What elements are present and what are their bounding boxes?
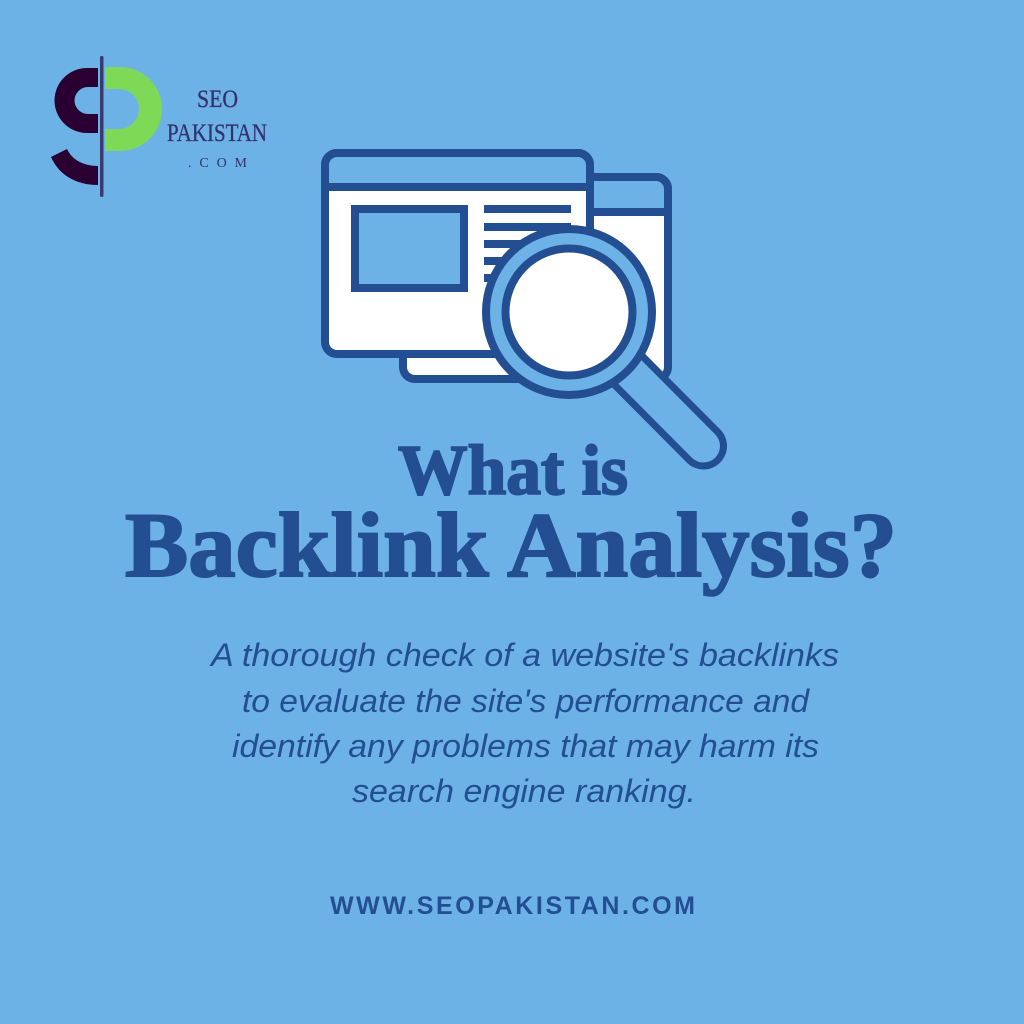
- text lines: [484, 205, 571, 282]
- logo divider: [100, 56, 104, 197]
- image placeholder: [355, 209, 464, 288]
- magnifier handle: [612, 354, 704, 446]
- description paragraph: to evaluate the site's performance and: [242, 683, 810, 719]
- back browser window: [403, 177, 668, 379]
- logo wordmark: SEO: [197, 86, 238, 113]
- magnifier outer ring: [486, 229, 652, 395]
- title line 1: What is: [398, 432, 628, 510]
- description paragraph: identify any problems that may harm its: [232, 728, 819, 764]
- illustration: browser windows and magnifying glass: [325, 153, 704, 446]
- description paragraph: search engine ranking.: [352, 773, 696, 809]
- website URL: WWW.SEOPAKISTAN.COM: [330, 892, 695, 920]
- logo wordmark: [167, 86, 267, 171]
- front browser window: [325, 153, 590, 354]
- magnifier lens: [506, 248, 632, 376]
- logo wordmark: .COM: [188, 156, 248, 171]
- description paragraph: A thorough check of a website's backlinks: [209, 637, 839, 673]
- description paragraph: [209, 637, 839, 809]
- icon: logo S lettermark: [51, 68, 98, 185]
- logo wordmark: PAKISTAN: [167, 120, 267, 147]
- icon: logo P lettermark: [105, 67, 162, 151]
- logo: SEO Pakistan: [51, 56, 267, 197]
- title: [125, 432, 897, 596]
- title line 2: Backlink Analysis?: [125, 494, 897, 596]
- icon: magnifying glass: [486, 229, 704, 446]
